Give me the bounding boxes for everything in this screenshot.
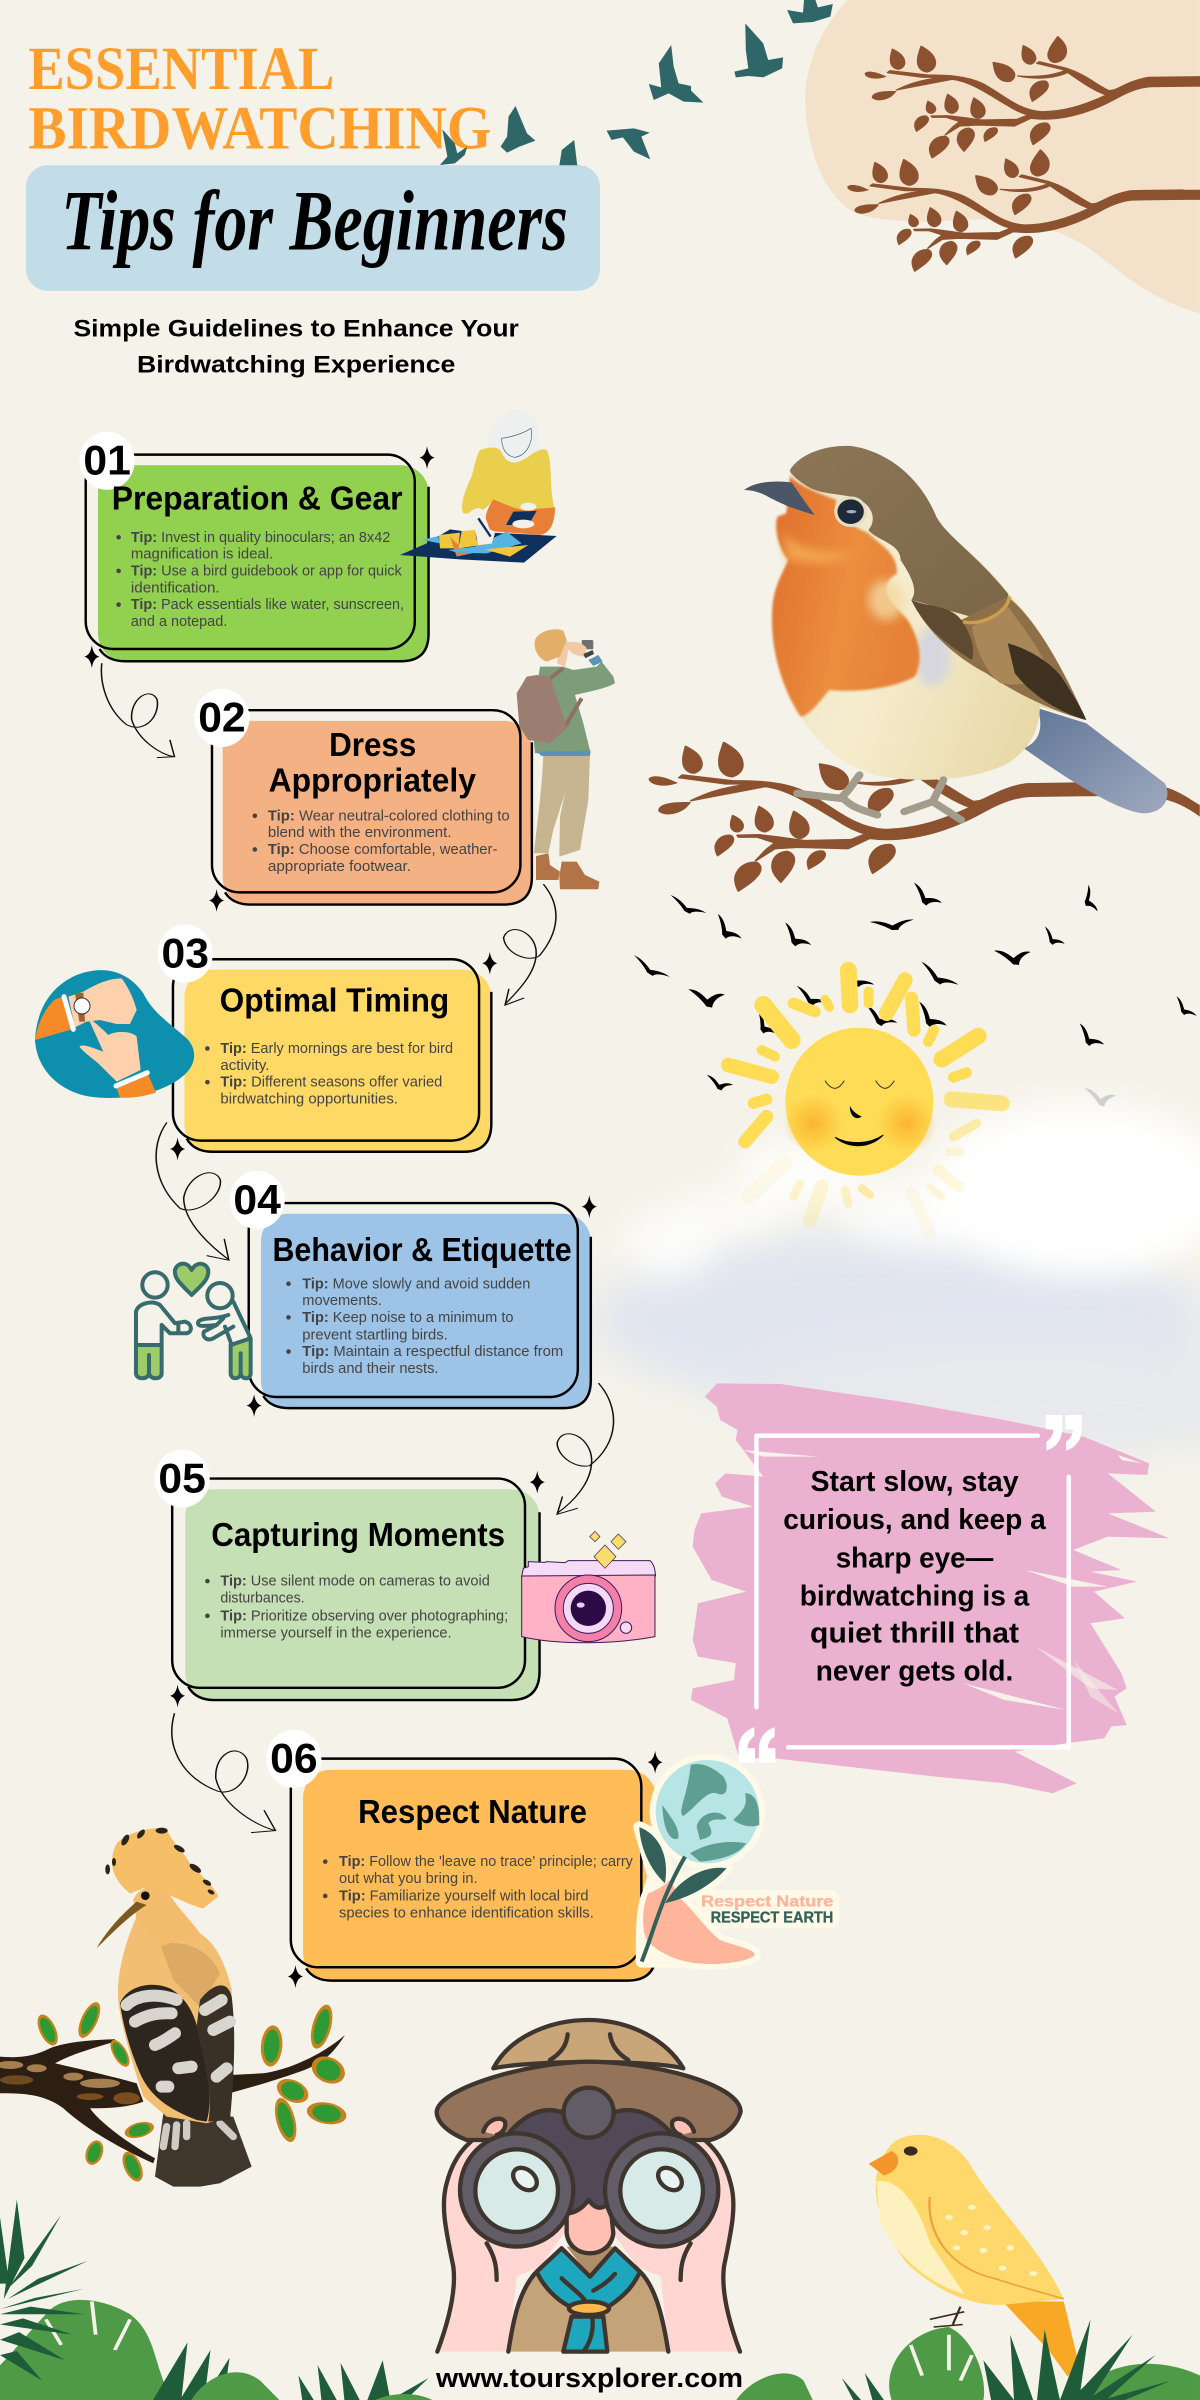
face: [502, 428, 532, 457]
tagline: Birdwatching Experience: [137, 352, 455, 379]
card fill: [98, 465, 429, 661]
card fill: [261, 1214, 591, 1408]
camera body: [522, 1575, 655, 1643]
left monstera slits: [46, 2302, 130, 2350]
brown head and back: [790, 446, 1018, 630]
hoopoe leaves: [33, 1999, 349, 2185]
tagline: Simple Guidelines to Enhance Your: [73, 316, 519, 343]
illustration: yellow bird: [869, 2135, 1079, 2377]
number badge: 03: [161, 930, 209, 976]
card tips: Tip: Early mornings are best for bird: [220, 1041, 453, 1057]
hand outlines: [437, 2132, 740, 2352]
card tips: Tip: Follow the 'leave no trace' principle; carry: [339, 1854, 634, 1870]
wing line: [929, 2197, 1064, 2299]
scarf knot: [569, 2302, 609, 2315]
coat: [508, 2273, 668, 2352]
illustration: hiker with binoculars: [517, 629, 615, 889]
number badge: [155, 1449, 210, 1508]
number badge: [194, 689, 249, 747]
card tips: birds and their nests.: [302, 1361, 439, 1377]
banner background: [26, 165, 600, 291]
peach blob: [805, 0, 1200, 313]
hand: [643, 1880, 755, 1964]
panel: step 06 respect nature: [266, 1730, 656, 1981]
binoculars and hand: [568, 640, 594, 658]
head and hair: [535, 629, 570, 667]
flock of teal birds: [440, 0, 833, 167]
quote panel: [691, 1383, 1170, 1793]
camera lens: [555, 1575, 622, 1642]
card heading: [269, 727, 476, 799]
left palm fronds: [0, 2199, 230, 2400]
tail: [1024, 708, 1167, 813]
beak: [744, 481, 815, 515]
navy mat: [400, 529, 557, 563]
orange pants: [486, 499, 555, 535]
quote text: birdwatching is a: [800, 1581, 1030, 1613]
illustration: scout with binoculars: [437, 2020, 741, 2352]
card tips: Tip: Prioritize observing over photographing;: [220, 1608, 508, 1624]
number badge: 02: [198, 695, 246, 741]
card tips: Tip: Use a bird guidebook or app for quick: [131, 564, 403, 580]
sticker text: Respect Nature: [701, 1894, 833, 1911]
flock of black birds: [629, 883, 1199, 1107]
curly arrow 4: [557, 1383, 614, 1514]
number badge: 05: [158, 1455, 206, 1501]
left wing: [120, 1985, 209, 2122]
title: ESSENTIAL: [28, 35, 334, 103]
card heading: Preparation & Gear: [112, 481, 403, 518]
number badge: [266, 1730, 321, 1788]
left monstera: [0, 2300, 172, 2400]
card heading: Optimal Timing: [220, 983, 449, 1020]
card tips: birdwatching opportunities.: [220, 1092, 398, 1108]
hoopoe eye: [141, 1891, 150, 1900]
card tips: immerse yourself in the experience.: [220, 1625, 452, 1641]
watch: [74, 993, 90, 1022]
number badge: 06: [270, 1735, 318, 1781]
watercolor robin on branch: [648, 446, 1200, 893]
yellow bird legs: [930, 2307, 964, 2327]
left lens: [460, 2133, 573, 2247]
yellow bird tail: [1003, 2302, 1079, 2377]
crest: [112, 1828, 218, 1908]
decorative peach blob with tree branches: [805, 0, 1200, 313]
tail: [155, 2113, 252, 2187]
card tips: appropriate footwear.: [268, 859, 411, 875]
card tips: activity.: [220, 1058, 269, 1074]
title: BIRDWATCHING: [28, 94, 491, 162]
writing hand: [468, 508, 495, 545]
hair: [487, 409, 545, 467]
card fill: [185, 1489, 540, 1700]
right hand: [611, 2132, 740, 2352]
branch tail end: [1158, 786, 1200, 817]
card tips: [323, 1854, 634, 1921]
green pants: [136, 1338, 251, 1378]
subtitle banner: [26, 165, 600, 291]
yellow bird belly: [876, 2181, 964, 2294]
number badge: [230, 1171, 285, 1229]
jacket: [533, 662, 615, 753]
curly arrow 5: [172, 1713, 276, 1833]
website footer: www.toursxplorer.com: [435, 2363, 743, 2393]
sun rays: [728, 970, 1002, 1233]
blue grey belly shadow: [915, 627, 951, 687]
far right monstera: [1071, 2364, 1200, 2400]
curly arrow 2: [504, 884, 556, 1005]
teal blob: [35, 970, 194, 1098]
quote text: sharp eye—: [836, 1542, 994, 1574]
illustration: hoopoe on branch: [0, 1828, 349, 2187]
card tips: Tip: Familiarize yourself with local bird: [339, 1889, 589, 1905]
card tips: magnification is ideal.: [131, 547, 273, 563]
card heading: Appropriately: [269, 762, 476, 799]
head and neck: [133, 1887, 200, 1947]
pointing hand: [79, 1018, 141, 1082]
pants: [534, 755, 590, 857]
number badge: 04: [233, 1177, 281, 1223]
feet: [797, 775, 961, 820]
small monstera left: [191, 2372, 279, 2400]
quote mark bottom: [739, 1727, 775, 1763]
figure outlines: [136, 1272, 250, 1345]
curly arrow 3: [156, 1122, 229, 1260]
card tips: and a notepad.: [131, 614, 227, 630]
tablet and hand: [506, 503, 537, 528]
watch hand: [68, 978, 137, 1027]
camera top: [522, 1561, 656, 1577]
card tips: prevent startling birds.: [302, 1327, 448, 1343]
card tips: Tip: Use silent mode on cameras to avoid: [220, 1574, 490, 1590]
illustration: woman with guidebook: [400, 409, 557, 563]
quote mark top: [1046, 1415, 1082, 1451]
card heading: Behavior & Etiquette: [272, 1232, 572, 1269]
card tips: [205, 1574, 508, 1641]
card fill: [223, 721, 532, 905]
card tips: [116, 530, 404, 630]
hat folds: [550, 2034, 628, 2060]
card tips: species to enhance identification skills.: [339, 1905, 594, 1921]
card tips: movements.: [302, 1293, 382, 1309]
robin branch: [648, 730, 1149, 893]
illustration: wristwatch: [35, 970, 194, 1098]
sticker text: RESPECT EARTH: [711, 1910, 833, 1927]
card tips: [205, 1041, 453, 1108]
illustration: people with heart: [136, 1264, 251, 1378]
yellow bird body: [876, 2135, 1064, 2305]
quote text: curious, and keep a: [783, 1504, 1047, 1536]
crest black tips: [105, 1828, 215, 1896]
sweater: [462, 447, 555, 514]
banner script text: Tips for Beginners: [61, 173, 568, 268]
wing inner: [972, 607, 1051, 685]
body: [772, 446, 1086, 780]
panel: step 05 capturing moments: [155, 1449, 540, 1700]
papers: [422, 530, 528, 557]
yellow bird eye: [904, 2146, 918, 2156]
fingertips: [483, 2119, 694, 2135]
pink brush stroke: [691, 1383, 1170, 1793]
brush dry streaks: [743, 1450, 1142, 1713]
chest highlight: [868, 580, 904, 620]
eye: [834, 496, 867, 527]
globe land: [662, 1764, 759, 1862]
hoopoe branches: [0, 2035, 345, 2163]
gold sparkles: [590, 1531, 626, 1568]
panel: step 01 preparation and gear: [80, 432, 429, 661]
scarf tail: [563, 2317, 607, 2352]
orange breast: [772, 477, 920, 717]
card fill: [184, 970, 491, 1152]
card tips: Tip: Pack essentials like water, sunscreen,: [131, 597, 404, 613]
card tips: Tip: Move slowly and avoid sudden: [302, 1276, 530, 1292]
panel: step 04 behavior and etiquette: [230, 1171, 591, 1408]
card tips: blend with the environment.: [268, 825, 452, 841]
card tips: Tip: Choose comfortable, weather-: [268, 842, 498, 858]
cloud: [590, 1105, 1200, 1460]
card fill: [303, 1770, 656, 1981]
globe: [656, 1760, 759, 1863]
flash button: [620, 1622, 632, 1633]
yellow bird beak: [869, 2151, 898, 2176]
card tips: Tip: Keep noise to a minimum to: [302, 1310, 514, 1326]
wing dots: [945, 2205, 1037, 2276]
card tips: [286, 1276, 563, 1377]
card tips: [253, 808, 510, 875]
right palm fronds: [842, 2319, 1171, 2400]
card tips: Tip: Maintain a respectful distance from: [302, 1344, 563, 1360]
title: [28, 35, 491, 162]
foliage along bottom edge: [0, 2199, 1200, 2400]
curly arrow 1: [101, 663, 174, 758]
plant stem and leaves: [639, 1827, 727, 1962]
right sleeve: [117, 1075, 156, 1098]
body: [118, 1917, 233, 2123]
card tips: identification.: [131, 580, 220, 596]
sun disc: [785, 1028, 933, 1176]
binocular bridge: [510, 2110, 670, 2213]
tagline: [73, 316, 519, 379]
quote text: Start slow, stay: [810, 1466, 1019, 1498]
binocular knob: [564, 2088, 614, 2138]
branch bark patches: [0, 2061, 140, 2104]
centre right monstera: [736, 2373, 813, 2400]
wing stripes: [127, 1996, 230, 2087]
sticker: respect nature globe and hand: [639, 1760, 833, 1964]
panel: step 02 dress appropriately: [194, 689, 532, 905]
wing golden band: [963, 597, 1009, 623]
quote text: quiet thrill that: [810, 1617, 1019, 1649]
blue hem and cuff: [537, 655, 603, 756]
right monstera: [889, 2327, 984, 2400]
left hand: [437, 2132, 567, 2352]
number badge: 01: [83, 437, 131, 483]
right monstera slits: [911, 2335, 972, 2381]
card heading: Capturing Moments: [211, 1517, 505, 1554]
card heading: Respect Nature: [358, 1794, 587, 1831]
body shade: [160, 1943, 220, 2007]
hat crown: [493, 2020, 683, 2068]
sticker text: [701, 1894, 833, 1927]
card tips: Tip: Wear neutral-colored clothing to: [268, 808, 510, 824]
sticker backing: [639, 1760, 833, 1964]
face: [567, 2197, 613, 2253]
cuffs: [64, 997, 147, 1086]
card tips: disturbances.: [220, 1591, 305, 1607]
panel: step 03 optimal timing: [158, 924, 491, 1152]
boots: [536, 853, 599, 889]
card tips: Tip: Different seasons offer varied: [220, 1075, 442, 1091]
number badge: [80, 432, 135, 490]
illustration: pink camera: [522, 1531, 656, 1643]
centre green tip: [375, 2394, 432, 2400]
quote text: never gets old.: [816, 1656, 1013, 1688]
robin bird: [744, 446, 1200, 820]
cloud white puffs: [625, 1105, 1200, 1277]
backpack: [517, 668, 582, 743]
neck: [567, 2247, 613, 2277]
upper branch: [864, 36, 1200, 160]
hoopoe beak: [97, 1902, 147, 1948]
sun face: [825, 1081, 894, 1146]
right lens: [605, 2133, 718, 2247]
white frame: [756, 1436, 1069, 1747]
wing: [911, 597, 1086, 720]
smiling sun: [728, 970, 1002, 1233]
cloud blue shade: [590, 1230, 1200, 1460]
wing dark primaries: [1008, 643, 1086, 720]
left sleeve: [35, 997, 75, 1040]
sparkle stars: [84, 446, 663, 1988]
lower branch: [847, 150, 1200, 273]
card tips: Tip: Invest in quality binoculars; an 8x42: [131, 530, 390, 546]
quote text: [783, 1466, 1047, 1688]
card tips: out what you bring in.: [339, 1871, 478, 1887]
light throat patch: [783, 530, 854, 563]
number badge: [158, 924, 213, 983]
sun blush: [783, 1093, 937, 1153]
hat brim: [437, 2062, 741, 2140]
card heading: Dress: [329, 727, 416, 764]
scarf: [537, 2248, 640, 2307]
tail light streaks: [163, 2123, 233, 2147]
wing shoulder: [911, 600, 973, 660]
scarf lines: [562, 2274, 615, 2352]
right wing: [197, 1985, 234, 2122]
centre fronds: [298, 2360, 429, 2400]
heart: [175, 1264, 208, 1295]
